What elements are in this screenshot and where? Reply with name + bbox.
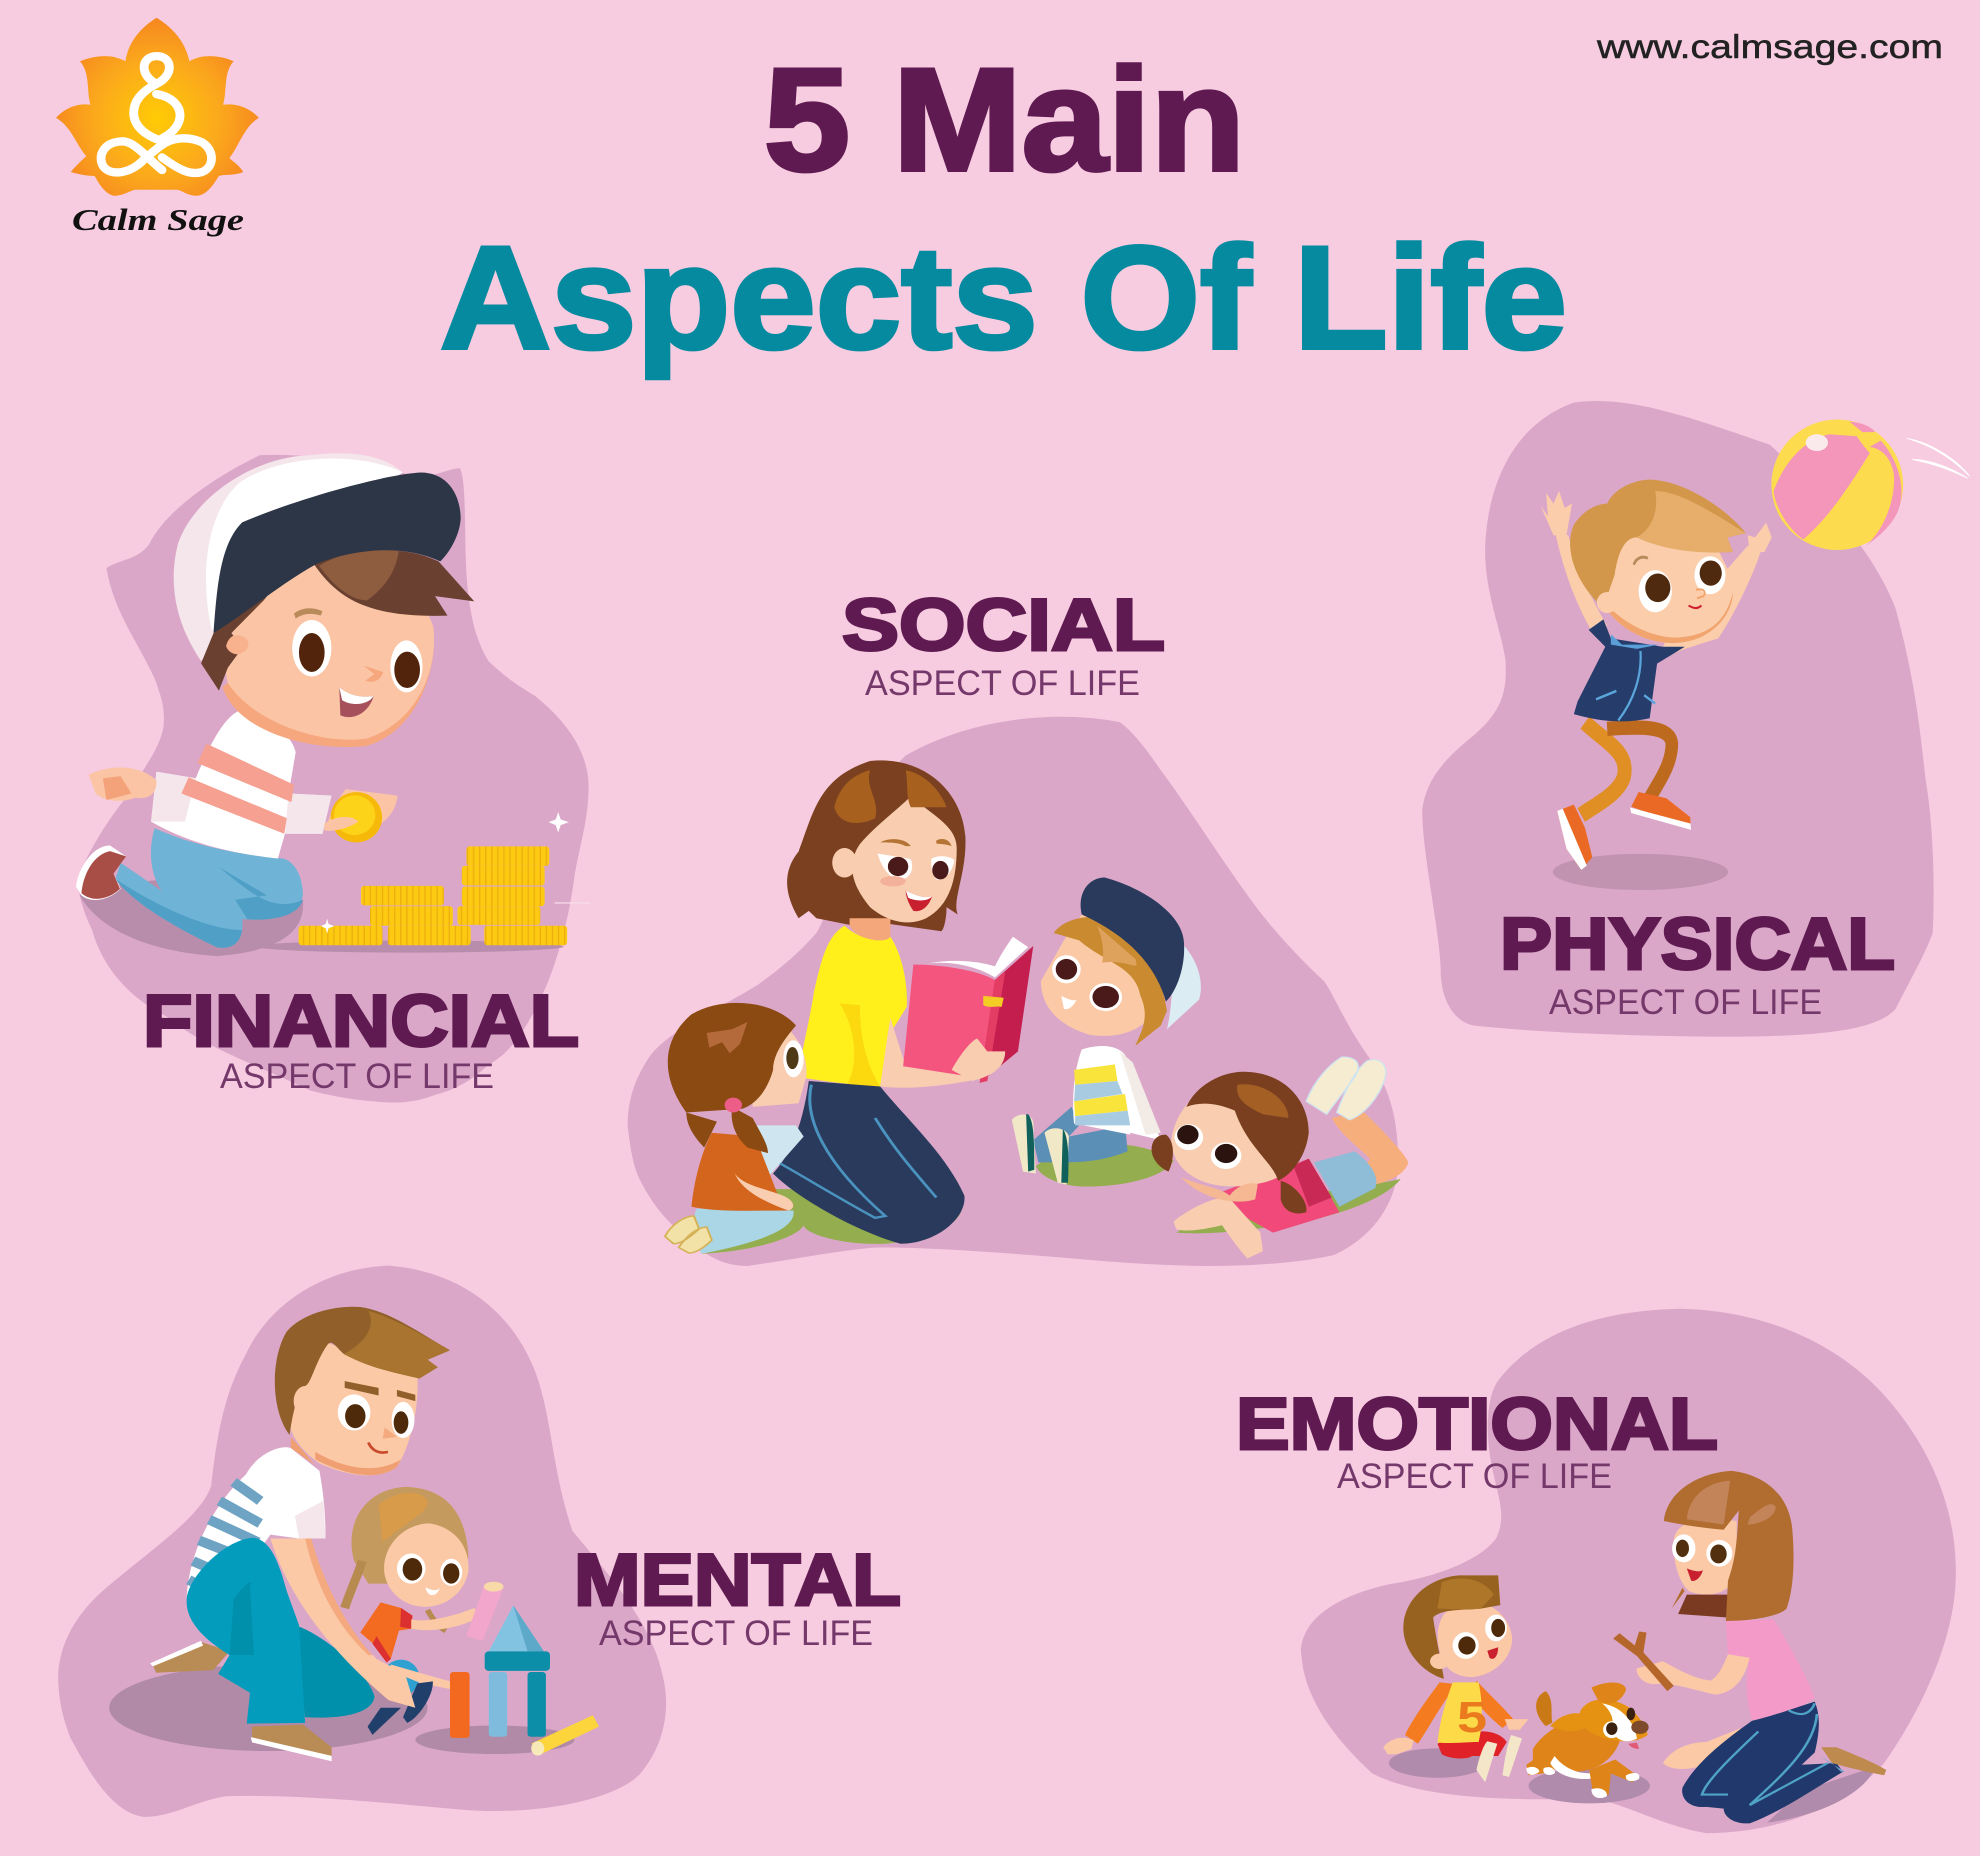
subheading: ASPECT OF LIFE	[599, 1614, 873, 1653]
icon: lotus	[56, 18, 259, 196]
subheading: ASPECT OF LIFE	[220, 1057, 494, 1096]
heading: SOCIAL	[842, 585, 1165, 666]
shirt	[151, 711, 331, 858]
woman face	[852, 796, 957, 922]
beach ball	[1771, 419, 1903, 550]
boy shirt	[1437, 1682, 1482, 1743]
illustration: father and daughter with blocks	[58, 1266, 666, 1817]
illustration: boy with coins	[76, 453, 590, 1103]
panel: financial	[76, 453, 590, 1103]
puppy	[1536, 1691, 1552, 1726]
woman neck	[850, 918, 890, 943]
panel: social	[628, 585, 1408, 1266]
book	[929, 937, 1028, 977]
back shoe	[152, 1642, 230, 1673]
woman arms behind	[1663, 1728, 1754, 1769]
green mats	[702, 1188, 962, 1254]
subheading: ASPECT OF LIFE	[1549, 983, 1822, 1022]
logo wordmark: Calm Sage	[72, 202, 244, 237]
cap back	[174, 453, 403, 661]
boy arms	[1405, 1681, 1513, 1744]
woman arm	[880, 1018, 1000, 1088]
website url: www.calmsage.com	[1596, 28, 1943, 65]
motion lines	[1907, 438, 1970, 478]
panel: mental	[58, 1266, 901, 1817]
woman hair	[787, 760, 966, 931]
arms	[1555, 533, 1607, 632]
shoes of girl	[368, 1708, 401, 1735]
woman front arm	[1637, 1654, 1750, 1695]
hands and coin	[89, 767, 156, 801]
boy with cap	[1033, 1107, 1128, 1162]
front shoe	[252, 1725, 332, 1757]
jeans	[115, 828, 303, 948]
girl lying down	[1332, 1111, 1408, 1185]
shoe	[76, 845, 126, 900]
pants	[1581, 723, 1625, 815]
heading: PHYSICAL	[1500, 904, 1895, 985]
jeans	[1682, 1702, 1843, 1823]
coins	[299, 846, 567, 945]
woman head	[1674, 1519, 1737, 1595]
stick	[1613, 1631, 1674, 1691]
shadows	[1389, 1748, 1486, 1778]
shoes	[1557, 805, 1592, 870]
shadow	[1553, 854, 1728, 890]
illustration: boy catching ball	[1422, 401, 1970, 1037]
title	[440, 38, 1567, 379]
heading: MENTAL	[574, 1540, 901, 1621]
subheading: ASPECT OF LIFE	[865, 664, 1140, 703]
illustration: mother boy and puppy	[1301, 1309, 1956, 1833]
panel: physical	[1422, 401, 1970, 1037]
father arm	[270, 1538, 415, 1708]
face detail	[226, 635, 248, 654]
woman jeans	[773, 1081, 965, 1244]
hair	[201, 579, 281, 691]
jeans	[295, 1625, 374, 1718]
shadow	[80, 880, 303, 956]
subheading: ASPECT OF LIFE	[1337, 1457, 1612, 1496]
head	[1600, 534, 1733, 643]
boy head	[1438, 1601, 1512, 1677]
illustration: woman reading to children	[628, 717, 1408, 1266]
woman shirt	[799, 926, 907, 1087]
cap visor	[214, 473, 461, 633]
girl braids hair and body	[351, 1487, 468, 1584]
father head	[291, 1437, 315, 1465]
logo: Calm Sage	[56, 18, 259, 237]
woman shirt	[1726, 1619, 1815, 1720]
woman neck	[1678, 1595, 1728, 1617]
title line two: Aspects Of Life	[440, 216, 1567, 379]
jacket	[1574, 619, 1685, 721]
blocks	[466, 1584, 503, 1641]
title line one: 5 Main	[764, 38, 1245, 201]
heading: FINANCIAL	[143, 981, 579, 1062]
shirt	[187, 1447, 326, 1601]
heading: EMOTIONAL	[1236, 1384, 1718, 1465]
boy pants and shoes	[1437, 1731, 1507, 1758]
neck shadow and face	[222, 613, 434, 747]
left girl	[755, 1125, 804, 1177]
shadows	[109, 1665, 428, 1751]
shoes	[1821, 1747, 1886, 1775]
shirt number: 5	[1457, 1693, 1487, 1742]
panel: emotional	[1236, 1309, 1956, 1833]
